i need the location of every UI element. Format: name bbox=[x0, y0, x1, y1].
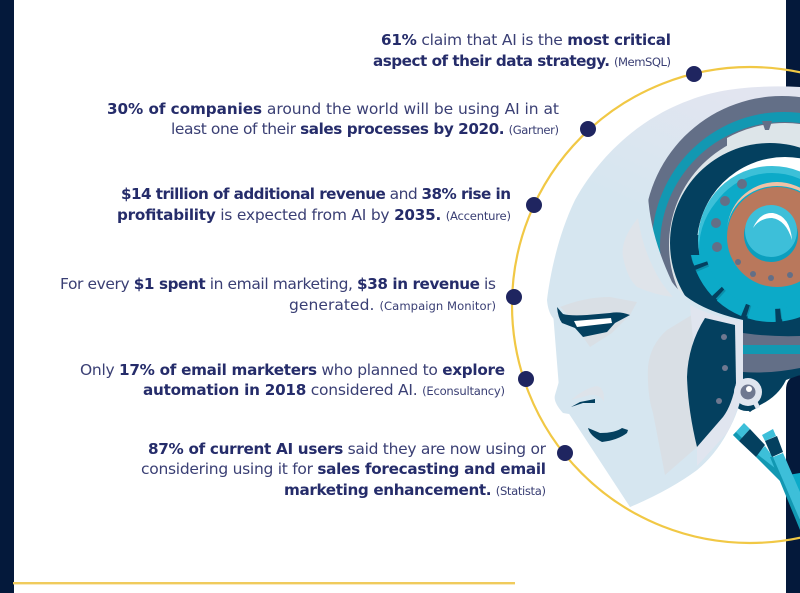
stat 3: revenue and profitability: $14 trillion of additional revenue and 38% rise in bbox=[121, 185, 511, 203]
cheek shade bbox=[648, 316, 697, 474]
stat 1: AI data strategy bbox=[373, 31, 702, 82]
navy neck and lower stripes bbox=[738, 333, 800, 412]
nostril bbox=[571, 399, 595, 407]
stat 6: sales forecasting: considering using it for sales forecasting and email bbox=[141, 460, 546, 478]
stat 3: revenue and profitability: profitability is expected from AI by 2035. (Accenture) bbox=[117, 206, 511, 224]
right border bar top bbox=[786, 0, 800, 90]
face front overlay bbox=[554, 200, 743, 507]
brain rings bbox=[648, 96, 800, 318]
nose shade bbox=[571, 386, 604, 402]
copper disc bbox=[727, 182, 800, 287]
jaw plate bbox=[690, 305, 743, 466]
stat 4: email marketing ROI: generated. (Campaign Monitor) bbox=[289, 296, 496, 314]
mouth bbox=[588, 428, 628, 442]
stat 3: revenue and profitability bbox=[117, 185, 542, 224]
white ring bbox=[698, 157, 800, 235]
stat 6: sales forecasting: 87% of current AI users said they are now using or bbox=[148, 440, 547, 458]
stat 2: sales processes: least one of their sales processes by 2020. (Gartner) bbox=[171, 120, 559, 138]
left border bar bbox=[0, 0, 14, 593]
cable right bbox=[762, 429, 800, 530]
stat 5: automation: automation in 2018 considered AI. (Econsultancy) bbox=[143, 381, 505, 399]
ear bolt bbox=[734, 378, 762, 409]
cheek panel bbox=[687, 318, 736, 447]
orbit arc bbox=[512, 67, 800, 543]
stat 4: email marketing ROI: For every $1 spent in email marketing, $38 in revenue is bbox=[60, 275, 496, 293]
central lens bbox=[744, 205, 798, 262]
gear bbox=[697, 164, 800, 322]
gear rivets bbox=[711, 179, 793, 281]
cable left bbox=[733, 423, 780, 481]
bottom rule bbox=[13, 582, 515, 584]
right border bar bottom bbox=[786, 375, 800, 593]
stat 2: sales processes bbox=[107, 100, 596, 138]
stat 6: sales forecasting: marketing enhancement. (Statista) bbox=[284, 481, 546, 499]
stat 1: AI data strategy: aspect of their data strategy. (MemSQL) bbox=[373, 52, 671, 70]
stat 5: automation bbox=[80, 361, 534, 399]
robot head illustration bbox=[547, 86, 800, 530]
temple shade bbox=[623, 218, 673, 297]
stat 1: AI data strategy: 61% claim that AI is the most critical bbox=[381, 31, 671, 49]
eye shade bbox=[560, 297, 637, 347]
eye bbox=[557, 307, 630, 337]
stat 4: email marketing ROI bbox=[60, 275, 522, 314]
stat 6: sales forecasting bbox=[141, 440, 573, 499]
stat 2: sales processes: 30% of companies around the world will be using AI in at bbox=[107, 100, 559, 118]
stat 5: automation: Only 17% of email marketers who planned to explore bbox=[80, 361, 505, 379]
head silhouette bbox=[547, 86, 800, 507]
